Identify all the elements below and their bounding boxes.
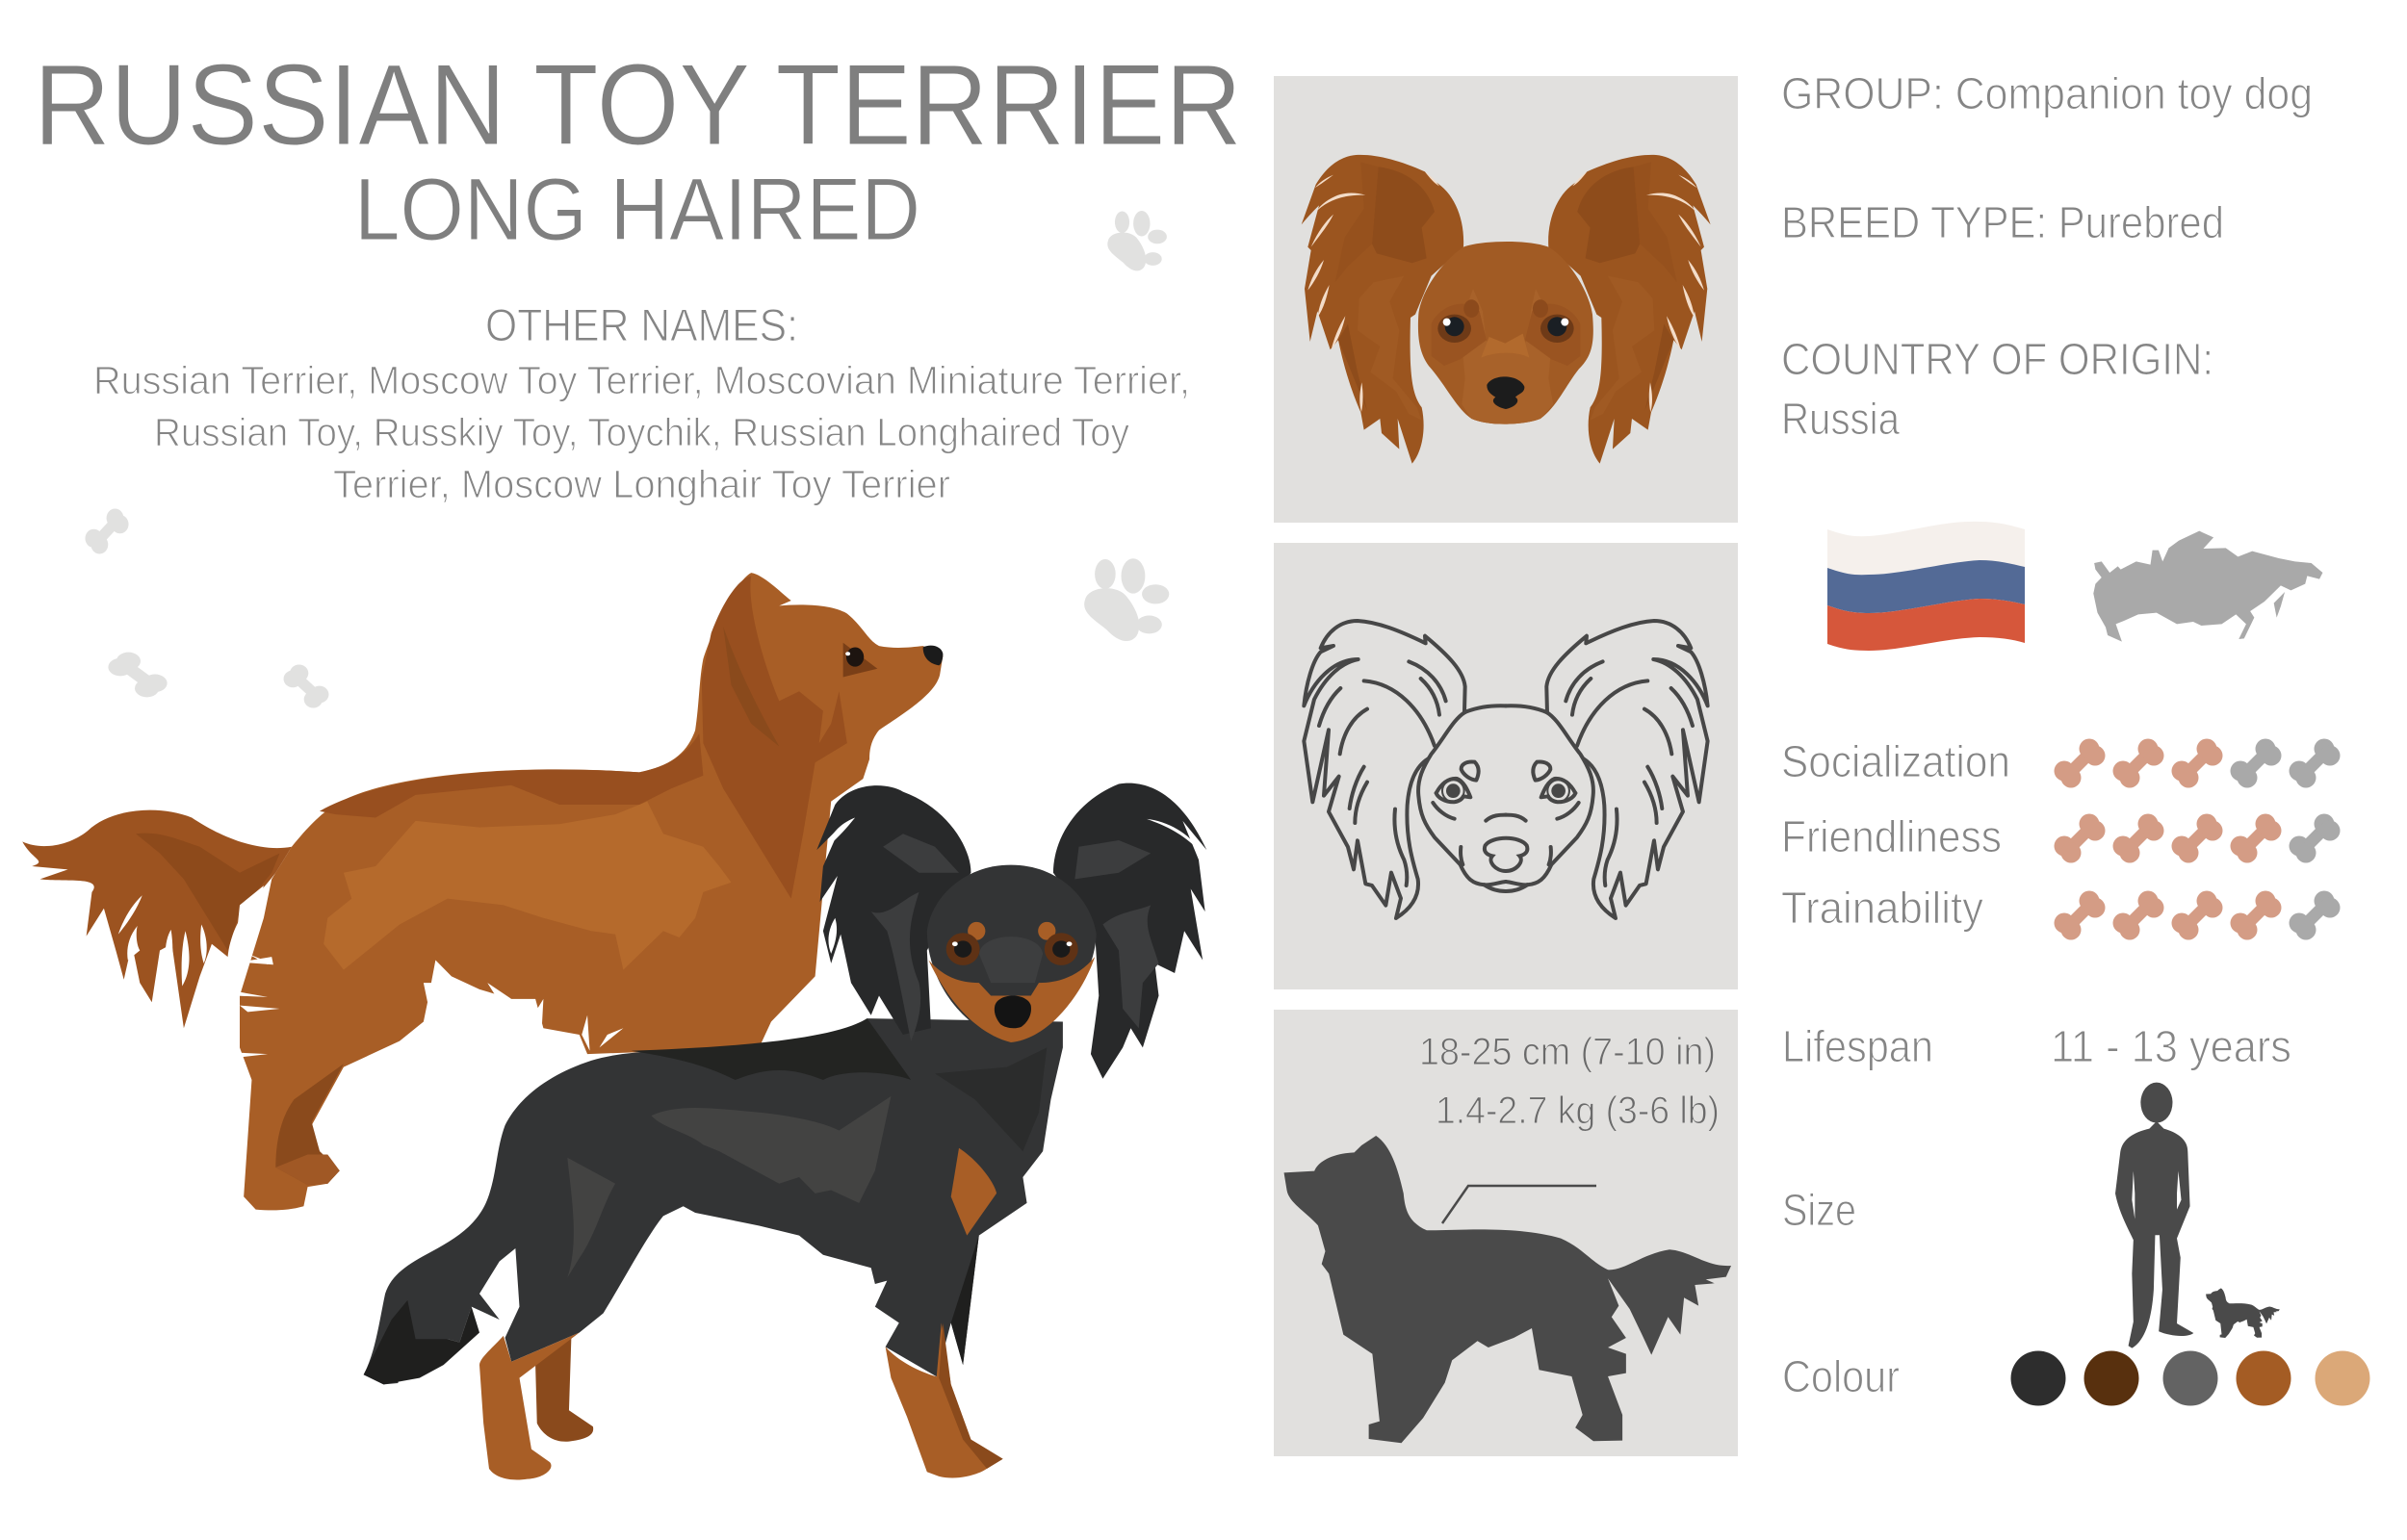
illustration: red long-haired dog	[22, 573, 943, 1210]
title: RUSSIAN TOY TERRIER	[34, 40, 1242, 169]
other names heading: OTHER NAMES:	[485, 299, 798, 350]
panel: red dog face	[1274, 76, 1738, 523]
other names list	[93, 358, 1190, 506]
breed group: GROUP: Companion toy dog	[1781, 68, 2313, 118]
label: trainability: Trainability	[1781, 883, 1983, 933]
illustration: outline face	[1304, 621, 1708, 918]
rating: trainability bones	[2055, 891, 2340, 939]
label: socialization: Socialization	[1781, 736, 2010, 786]
label: friendliness: Friendliness	[1781, 811, 2002, 861]
lifespan value: 11 - 13 years	[2051, 1021, 2291, 1071]
label: colour: Colour	[1782, 1351, 1900, 1401]
colour swatches	[2010, 1351, 2370, 1405]
height label: 18-25 cm (7-10 in)	[1419, 1031, 1716, 1073]
country of origin	[1781, 334, 2213, 444]
icon: map of Russia	[2093, 531, 2322, 642]
illustration: black and tan dog	[364, 783, 1206, 1480]
panel: size and weight	[1274, 1010, 1738, 1456]
other names list: Terrier, Moscow Longhair Toy Terrier	[333, 462, 950, 506]
icon: small paw top	[1107, 211, 1167, 270]
country of origin: COUNTRY OF ORIGIN:	[1781, 334, 2213, 384]
label: lifespan: Lifespan	[1782, 1021, 1933, 1071]
weight label: 1.4-2.7 kg (3-6 lb)	[1436, 1090, 1720, 1132]
icon: bone upper left	[85, 509, 129, 553]
label: size: Size	[1782, 1185, 1856, 1235]
icon: bone left	[108, 653, 168, 697]
icon: bone middle	[284, 664, 328, 708]
rating: friendliness bones	[2055, 814, 2340, 862]
other names list: Russian Toy, Russkiy Toy, Toychik, Russian Longhaired Toy	[154, 410, 1129, 454]
subtitle: LONG HAIRED	[354, 161, 920, 259]
icon: paw right of dogs	[1084, 558, 1169, 641]
callout line	[1442, 1186, 1596, 1223]
size comparison: person and dog	[2115, 1083, 2280, 1348]
dog silhouette	[1284, 1136, 1731, 1443]
breed type: BREED TYPE: Purebred	[1781, 197, 2224, 247]
illustration: face in colour	[1302, 155, 1711, 464]
panel: line art face	[1274, 543, 1738, 989]
icon: Russian flag	[1827, 522, 2025, 651]
other names list: Russian Terrier, Moscow Toy Terrier, Moscovian Miniature Terrier,	[93, 358, 1190, 402]
rating: socialization bones	[2055, 739, 2340, 787]
country of origin: Russia	[1781, 394, 1900, 444]
